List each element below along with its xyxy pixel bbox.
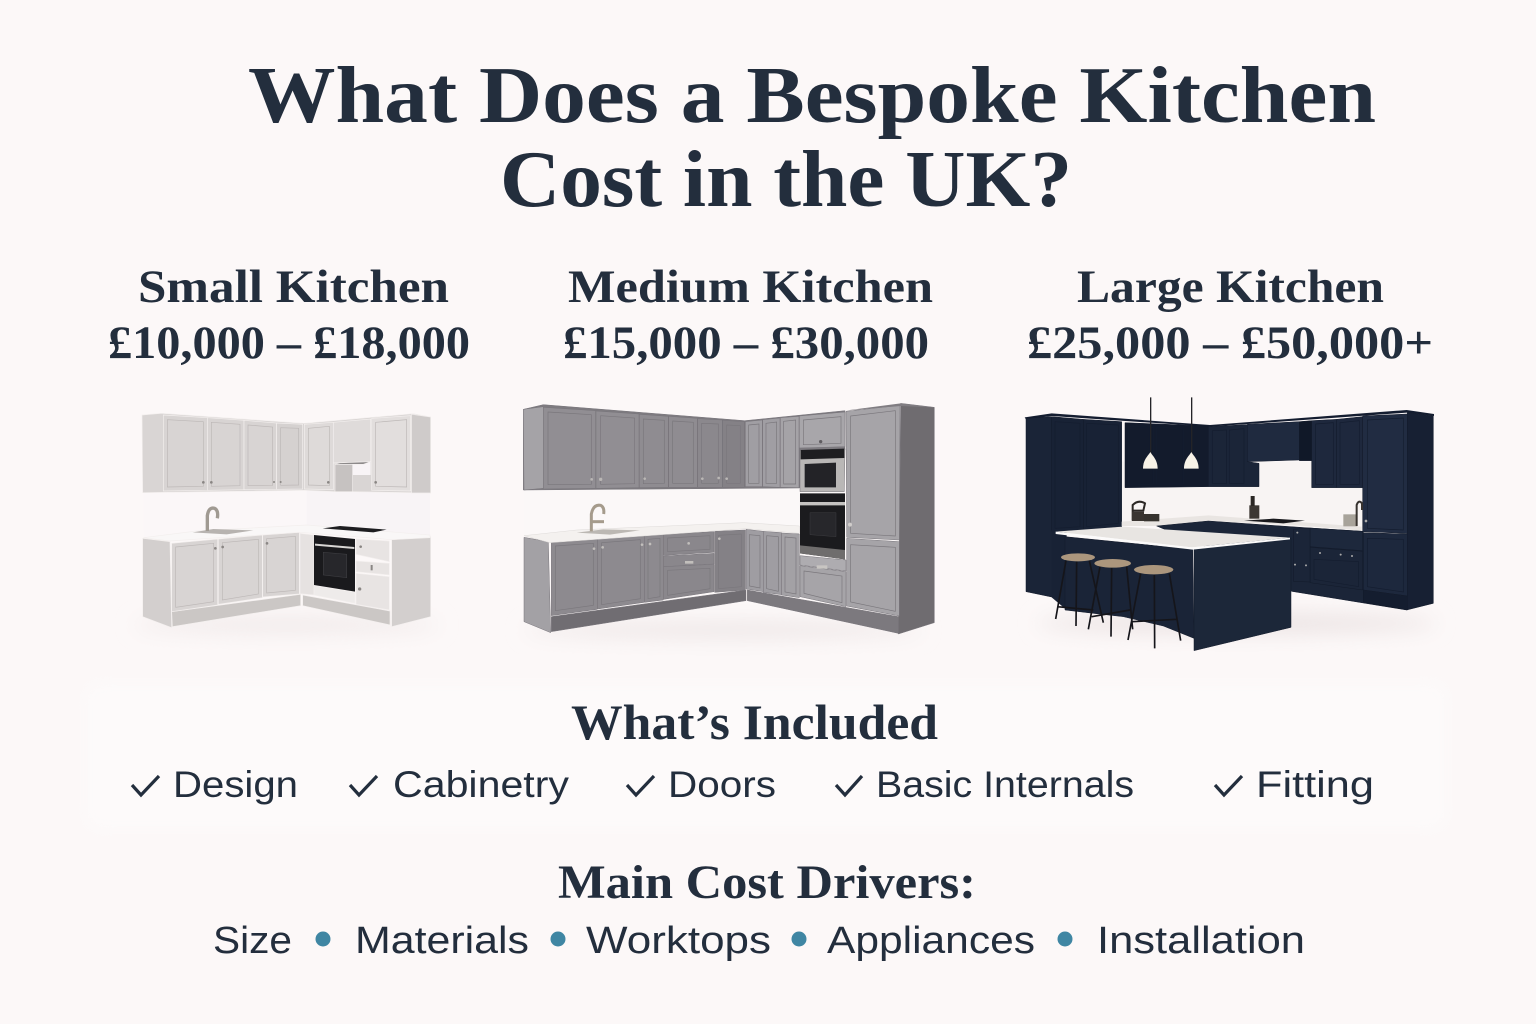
worktop back (1122, 515, 1362, 531)
item: design: Design (173, 764, 298, 805)
oven (314, 535, 355, 592)
oven (800, 493, 845, 559)
hob (323, 526, 387, 532)
bar stools (1056, 553, 1181, 648)
item: basic internals: Basic Internals (876, 764, 1134, 805)
sink and tap (577, 505, 640, 535)
title: What Does a Bespoke Kitchen (248, 52, 1376, 140)
tall right unit (1363, 413, 1433, 610)
item: design (132, 764, 298, 805)
heading: what's included: What’s Included (571, 694, 938, 750)
upper cabinets (523, 405, 845, 490)
heading: medium kitchen price: £15,000 – £30,000 (563, 317, 929, 369)
tall left unit (1026, 417, 1122, 610)
list: cost drivers: Installation (1097, 920, 1305, 962)
base cabinets (524, 523, 898, 633)
item: fitting (1215, 764, 1374, 805)
heading: small kitchen price (108, 261, 470, 369)
item: cabinetry: Cabinetry (393, 764, 570, 805)
back wall units (1025, 410, 1434, 488)
heading: large kitchen price: Large Kitchen (1077, 261, 1384, 313)
heading: medium kitchen price: Medium Kitchen (568, 261, 933, 313)
list: cost drivers: Appliances (827, 920, 1035, 962)
pendant lights (1143, 397, 1199, 469)
title (248, 52, 1376, 224)
heading: large kitchen price (1027, 261, 1433, 369)
illustration: medium kitchen (523, 403, 934, 637)
title: Cost in the UK? (500, 136, 1072, 224)
sink and tap (193, 508, 253, 534)
list: cost drivers: Materials (355, 920, 529, 962)
list: cost drivers (213, 920, 1305, 962)
item: doors: Doors (668, 764, 776, 805)
item: fitting: Fitting (1256, 764, 1374, 805)
illustration: large kitchen (1025, 397, 1437, 651)
heading: small kitchen price: £10,000 – £18,000 (108, 317, 470, 369)
heading: medium kitchen price (563, 261, 933, 369)
list: cost drivers: Worktops (586, 920, 771, 962)
hob and counter items (1132, 496, 1362, 526)
worktop (524, 523, 799, 543)
island (1056, 527, 1291, 651)
panel: what's included (84, 682, 1448, 830)
item: doors (627, 764, 776, 805)
heading: small kitchen price: Small Kitchen (138, 261, 449, 313)
base units (1157, 521, 1407, 610)
list: cost drivers: Size (213, 920, 292, 962)
worktop (143, 525, 430, 541)
tall larder unit (845, 403, 934, 634)
illustration: small kitchen (133, 413, 440, 632)
microwave (800, 449, 845, 492)
heading: main cost drivers: Main Cost Drivers: (558, 856, 976, 909)
base cabinets (143, 532, 431, 628)
upper cabinets (142, 413, 431, 493)
heading: large kitchen price: £25,000 – £50,000+ (1027, 317, 1433, 369)
